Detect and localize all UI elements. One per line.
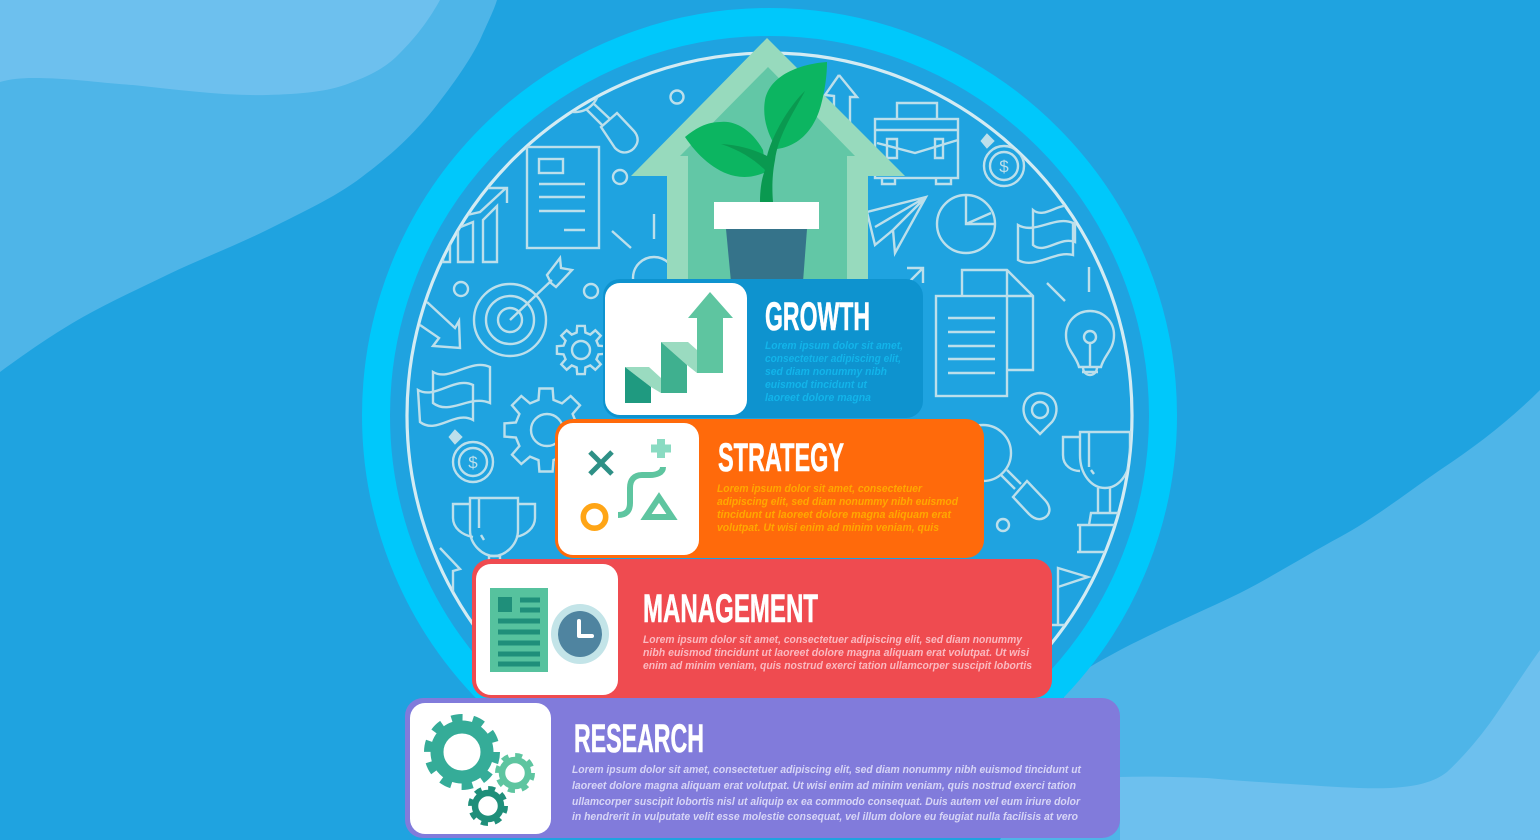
icon: briefcase [875, 103, 958, 184]
panel: management [472, 559, 1052, 698]
icon: location pin [1024, 393, 1056, 434]
icon: strategy play [583, 439, 672, 528]
text: research body: Lorem ipsum dolor sit amet, consectetuer adipiscing elit, sed diam nonummy nibh euismod tincidunt ut [572, 764, 1082, 776]
outer cyan ring [376, 22, 1163, 809]
text: strategy body [717, 483, 958, 534]
icon: growth arrow steps [625, 292, 733, 403]
icon: coin right [982, 135, 1024, 186]
icon: document and clock [490, 588, 609, 672]
heading: strategy: STRATEGY [718, 436, 844, 480]
icon: paper plane [867, 197, 926, 253]
icon: coin right: $ [999, 157, 1009, 176]
icon: light bulb [1066, 311, 1114, 375]
left leaf [685, 122, 766, 177]
icon: trophy right [1063, 432, 1130, 552]
text: management body: nibh euismod tincidunt ut laoreet dolore magna aliquam erat volutpat. Ut wisi [643, 647, 1030, 659]
icon: small arrow up [825, 75, 857, 130]
line icon pattern [418, 64, 1130, 625]
icon: coin left: $ [468, 453, 478, 472]
icon: small circles and ticks [454, 90, 1089, 531]
icon: bar chart with arrow [437, 188, 507, 262]
text: growth body: consectetuer adipiscing elit, [765, 353, 901, 365]
text: growth body: laoreet dolore magna [765, 392, 871, 404]
house outer [631, 38, 905, 282]
icon: file stack [936, 270, 1033, 396]
icon: coin left [450, 431, 493, 482]
text: research body: in hendrerit in vulputate velit esse molestie consequat, vel illum dolore eu feugiat nulla facilisis at vero [572, 811, 1078, 823]
icon: document [527, 147, 599, 248]
icon: small corner arrow [907, 266, 924, 283]
text: research body [572, 764, 1082, 823]
text: strategy body: volutpat. Ut wisi enim ad minim veniam, quis [717, 522, 939, 534]
text: management body: enim ad minim veniam, quis nostrud exerci tation ullamcorper suscipit lobortis [643, 660, 1032, 672]
panel: research [405, 698, 1120, 838]
pot rim [714, 202, 819, 229]
heading: growth: GROWTH [765, 295, 870, 339]
text: research body: ullamcorper suscipit lobortis nisl ut aliquip ex ea commodo consequat. Duis autem vel eum iriure dolor [572, 796, 1081, 808]
text: growth body: Lorem ipsum dolor sit amet, [765, 340, 903, 352]
icon: target with arrow [474, 258, 572, 356]
text: strategy body: Lorem ipsum dolor sit amet, consectetuer [717, 483, 923, 495]
thin white circle [407, 53, 1132, 778]
icon: gears [428, 718, 532, 824]
panel: strategy [555, 419, 984, 558]
icon: arrow down right [420, 302, 460, 348]
icon: small gear [557, 326, 605, 374]
right leaf [764, 62, 827, 149]
icon: flags left [418, 365, 490, 426]
icon: pie chart [937, 195, 995, 253]
text: growth body: sed diam nonummy nibh [765, 366, 887, 378]
text: management body [643, 634, 1032, 672]
text: strategy body: adipiscing elit, sed diam nonummy nibh euismod [717, 496, 958, 508]
icon: magnifier top [571, 96, 639, 154]
text: management body: Lorem ipsum dolor sit amet, consectetuer adipiscing elit, sed diam nonummy [643, 634, 1023, 646]
heading: research: RESEARCH [574, 717, 704, 761]
icon: house and plant [631, 38, 905, 282]
text: strategy body: tincidunt ut laoreet dolore magna aliquam erat [717, 509, 952, 521]
icon: pennant flag [1050, 568, 1088, 625]
icon: magnifier right [978, 424, 1051, 520]
house inner [680, 67, 855, 282]
pot body [726, 229, 807, 282]
panel: growth [603, 279, 923, 418]
text: research body: laoreet dolore magna aliquam erat volutpat. Ut wisi enim ad minim veniam, quis nostrud exerci tation [572, 780, 1076, 792]
icon: trophy left [440, 498, 535, 600]
stem [721, 91, 805, 202]
text: growth body: euismod tincidunt ut [765, 379, 868, 391]
heading: management: MANAGEMENT [643, 587, 818, 631]
icon: flags right [1018, 205, 1075, 263]
icon: large gear [504, 388, 588, 472]
text: growth body [765, 340, 903, 404]
